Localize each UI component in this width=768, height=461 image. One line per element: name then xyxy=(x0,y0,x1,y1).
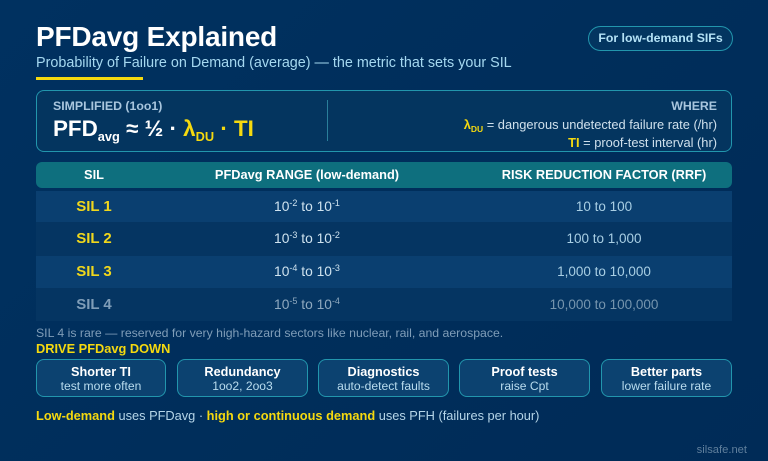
row: SIL 3 xyxy=(36,256,732,288)
definition: TI: TI = proof-test interval (hr) xyxy=(568,135,717,150)
row: SIL 2: SIL 2 xyxy=(76,230,112,247)
row: SIL 1: 10 to 100 xyxy=(576,199,632,214)
card: proof tests xyxy=(459,359,590,397)
table xyxy=(36,162,732,321)
row: SIL 2: 10-3 to 10-2 xyxy=(274,230,340,246)
section heading: drive PFDavg down: DRIVE PFDavg DOWN xyxy=(36,341,170,356)
badge: for low-demand SIFs: For low-demand SIFs xyxy=(598,31,723,45)
card: shorter TI: test more often xyxy=(61,379,141,393)
table header xyxy=(36,162,732,188)
table header: PFDavg RANGE (low-demand) xyxy=(215,167,399,182)
row: SIL 2: 100 to 1,000 xyxy=(566,231,642,246)
source credit: silsafe.net xyxy=(697,444,747,456)
card: better parts xyxy=(601,359,732,397)
title accent bar xyxy=(36,77,143,80)
card: better parts: lower failure rate xyxy=(622,379,711,393)
badge: for low-demand SIFs xyxy=(588,26,733,51)
row: SIL 2 xyxy=(36,222,732,256)
card: redundancy: 1oo2, 2oo3 xyxy=(212,379,273,393)
row: SIL 1: SIL 1 xyxy=(76,198,112,215)
footnote: Low-demand uses PFDavg · high or continuous demand uses PFH (failures per hour) xyxy=(36,408,539,423)
formula: PFDavg ≈ ½ · λDU · TI xyxy=(53,116,254,144)
panel: formula xyxy=(36,90,732,152)
SIL 4 note: SIL 4 is rare — reserved for very high-hazard sectors like nuclear, rail, and aerospace. xyxy=(36,326,503,340)
card: diagnostics: auto-detect faults xyxy=(337,379,430,393)
card: proof tests: raise Cpt xyxy=(500,379,549,393)
card: better parts: Better parts xyxy=(631,365,702,379)
formula label: SIMPLIFIED (1oo1) xyxy=(53,99,162,113)
title: PFDavg Explained xyxy=(36,21,277,52)
row: SIL 3: SIL 3 xyxy=(76,263,112,280)
row: SIL 4: SIL 4 xyxy=(76,296,112,313)
card: redundancy: Redundancy xyxy=(204,365,281,379)
row: SIL 4: 10,000 to 100,000 xyxy=(550,297,658,312)
row: SIL 1 xyxy=(36,191,732,222)
subtitle: Probability of Failure on Demand (average) — the metric that sets your SIL xyxy=(36,55,512,71)
card: proof tests: Proof tests xyxy=(491,365,558,379)
card: shorter TI: Shorter TI xyxy=(71,365,131,379)
row: SIL 1: 10-2 to 10-1 xyxy=(274,198,340,214)
definition: lambda DU: λDU = dangerous undetected failure rate (/hr) xyxy=(464,117,717,134)
row: SIL 3: 10-4 to 10-3 xyxy=(274,263,340,279)
row: SIL 3: 1,000 to 10,000 xyxy=(557,264,651,279)
card: diagnostics: Diagnostics xyxy=(348,365,419,379)
row: SIL 4 xyxy=(36,288,732,321)
card: redundancy xyxy=(177,359,308,397)
where label: WHERE xyxy=(671,99,717,113)
table header: SIL xyxy=(84,167,104,182)
card: diagnostics xyxy=(318,359,449,397)
table header: RISK REDUCTION FACTOR (RRF) xyxy=(502,167,706,182)
row: SIL 4: 10-5 to 10-4 xyxy=(274,296,340,312)
card: shorter TI xyxy=(36,359,166,397)
panel divider xyxy=(327,100,328,141)
